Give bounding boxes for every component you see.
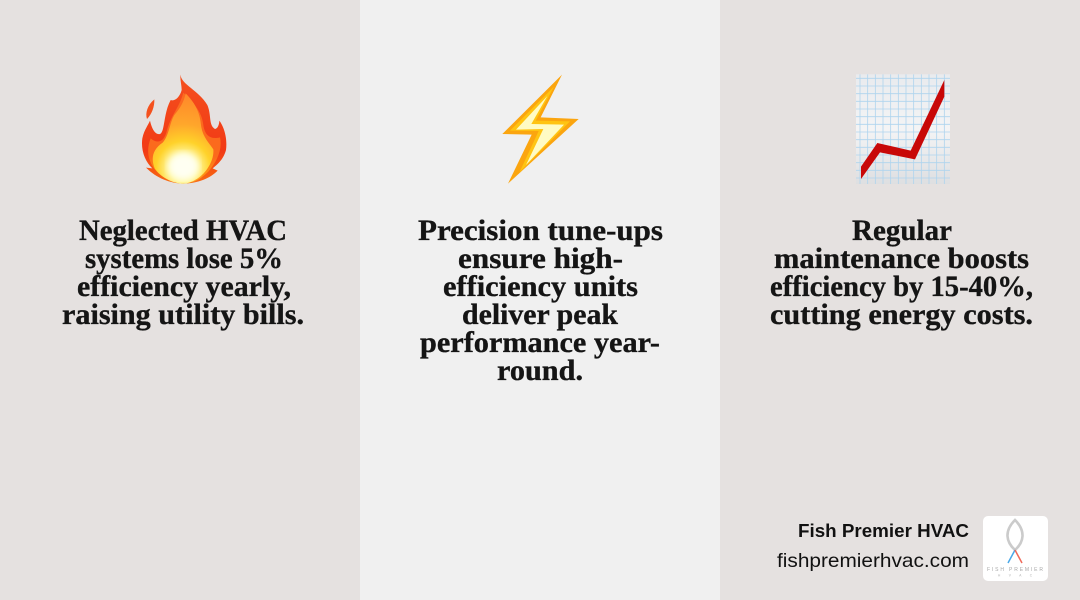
- heading: precision tune-ups: Precision tune-ups: [418, 214, 663, 247]
- heading: precision tune-ups: efficiency units: [443, 270, 638, 303]
- heading: neglected systems: [62, 214, 304, 331]
- logo: [983, 516, 1048, 581]
- logo: H V A C: [998, 574, 1033, 578]
- panel: precision tune-ups: [360, 0, 720, 600]
- icon: rising chart: [856, 74, 950, 184]
- heading: regular maintenance: maintenance boosts: [774, 242, 1029, 275]
- heading: regular maintenance: Regular: [852, 214, 952, 247]
- brand name: Fish Premier HVAC: [798, 521, 969, 541]
- panel: neglected systems: [0, 0, 360, 600]
- heading: precision tune-ups: deliver peak: [462, 298, 618, 331]
- website: fishpremierhvac.com: [777, 550, 969, 572]
- heading: neglected systems: raising utility bills.: [62, 298, 304, 331]
- heading: neglected systems: systems lose 5%: [85, 242, 283, 275]
- panel: regular maintenance: [720, 0, 1080, 600]
- brand footer: [777, 516, 1048, 581]
- heading: neglected systems: efficiency yearly,: [77, 270, 291, 303]
- heading: precision tune-ups: round.: [497, 354, 583, 387]
- heading: regular maintenance: [770, 214, 1033, 331]
- heading: regular maintenance: cutting energy costs.: [770, 298, 1033, 331]
- heading: precision tune-ups: [418, 214, 663, 387]
- heading: precision tune-ups: ensure high-: [458, 242, 623, 275]
- heading: neglected systems: Neglected HVAC: [79, 214, 287, 247]
- heading: precision tune-ups: performance year-: [420, 326, 660, 359]
- icon: fire: [142, 75, 226, 184]
- logo: FISH PREMIER: [987, 567, 1043, 573]
- heading: regular maintenance: efficiency by 15-40%,: [770, 270, 1033, 303]
- icon: lightning bolt: [502, 75, 579, 184]
